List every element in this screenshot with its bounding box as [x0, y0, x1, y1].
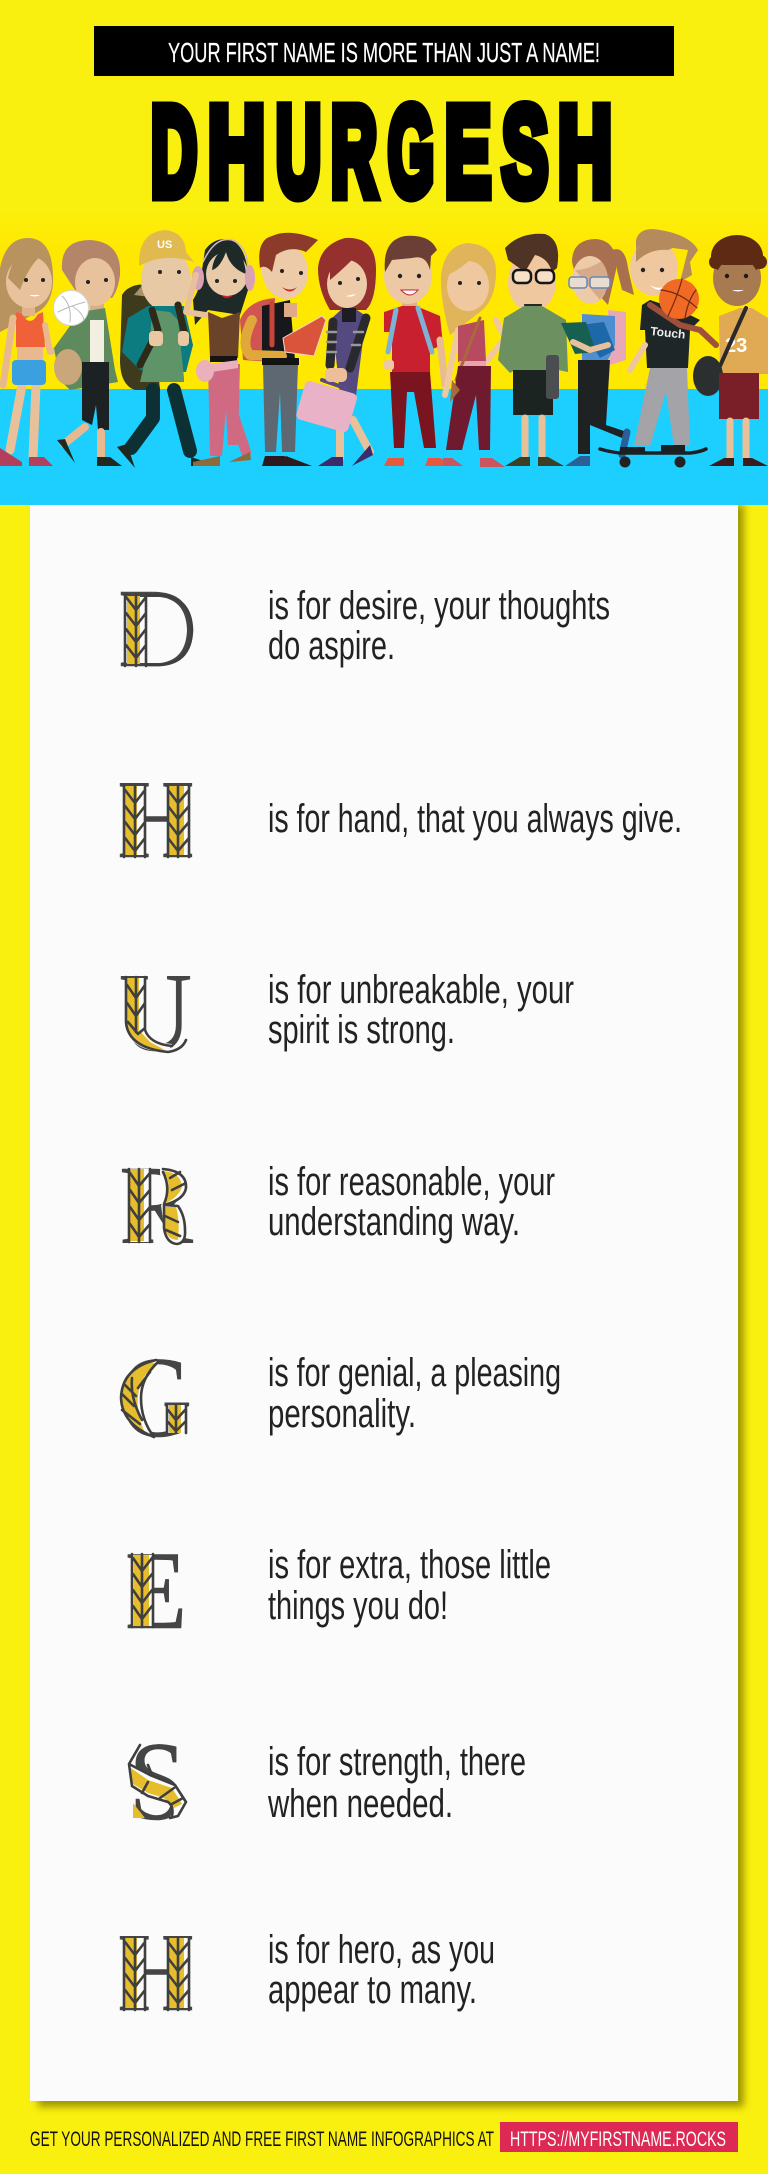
row 6: E: is for extra, those little — [268, 1543, 551, 1587]
row 1: D — [118, 567, 610, 691]
row 4: R: understanding way. — [268, 1200, 520, 1244]
title: name: H — [558, 81, 612, 222]
illustration banner: group of people — [0, 205, 768, 505]
blue band edge restored over shadow — [0, 495, 768, 505]
title: name: R — [331, 81, 377, 222]
person 10 — [561, 239, 634, 466]
person 6 — [295, 238, 376, 466]
person 9 — [498, 234, 568, 466]
row 5: G: personality. — [268, 1392, 416, 1436]
person 12: 23 — [725, 335, 747, 357]
person 11 — [600, 229, 716, 468]
row 5: G: is for genial, a pleasing — [268, 1351, 561, 1395]
panel shadow — [38, 505, 744, 2107]
row 6: E — [125, 1529, 551, 1653]
title: name: D — [151, 81, 197, 222]
letter E: E — [125, 1529, 187, 1653]
person 11: Touch — [650, 324, 686, 342]
title: name: G — [388, 81, 434, 222]
tagline bar — [94, 26, 674, 76]
person 5 — [240, 233, 326, 466]
letter U: U — [119, 951, 192, 1075]
row 3: U: is for unbreakable, your — [268, 968, 574, 1012]
letter S: S — [129, 1720, 186, 1844]
person 2 — [54, 240, 122, 466]
letter H: H — [117, 1911, 195, 2035]
row 8: H — [117, 1911, 495, 2035]
row 7: S: when needed. — [267, 1782, 453, 1826]
main white panel — [30, 505, 738, 2101]
person 4 — [186, 239, 255, 466]
row 8: H: appear to many. — [268, 1968, 477, 2012]
person 7 — [384, 236, 454, 466]
row 7: S — [129, 1720, 526, 1844]
title: name: S — [502, 81, 548, 222]
row 6: E: things you do! — [268, 1584, 448, 1628]
person 8 — [441, 243, 505, 467]
row 7: S: is for strength, there — [268, 1740, 526, 1784]
row 1: D: is for desire, your thoughts — [268, 584, 610, 628]
title: name: U — [276, 81, 321, 222]
row 2: H — [117, 758, 682, 882]
person 1 — [0, 238, 78, 466]
row 8: H: is for hero, as you — [268, 1928, 495, 1972]
row 4: R — [119, 1144, 555, 1268]
row 1: D: do aspire. — [268, 624, 395, 668]
letter D: D — [118, 567, 195, 691]
letter H: H — [117, 758, 195, 882]
person 3 — [117, 230, 218, 468]
row 3: U — [119, 951, 574, 1075]
letter R: R — [119, 1144, 193, 1268]
row 3: U: spirit is strong. — [268, 1008, 455, 1052]
letter G: G — [120, 1334, 192, 1462]
person 3: US — [157, 239, 172, 251]
person 12 — [693, 235, 768, 466]
row 5: G — [120, 1334, 561, 1462]
title: name: E — [445, 81, 491, 222]
title: name: H — [208, 81, 265, 222]
row 4: R: is for reasonable, your — [268, 1160, 555, 1204]
footer call to action: GET YOUR PERSONALIZED AND FREE FIRST NAME INFOGRAPHICS AT — [30, 2128, 494, 2151]
footer url badge — [500, 2122, 738, 2152]
